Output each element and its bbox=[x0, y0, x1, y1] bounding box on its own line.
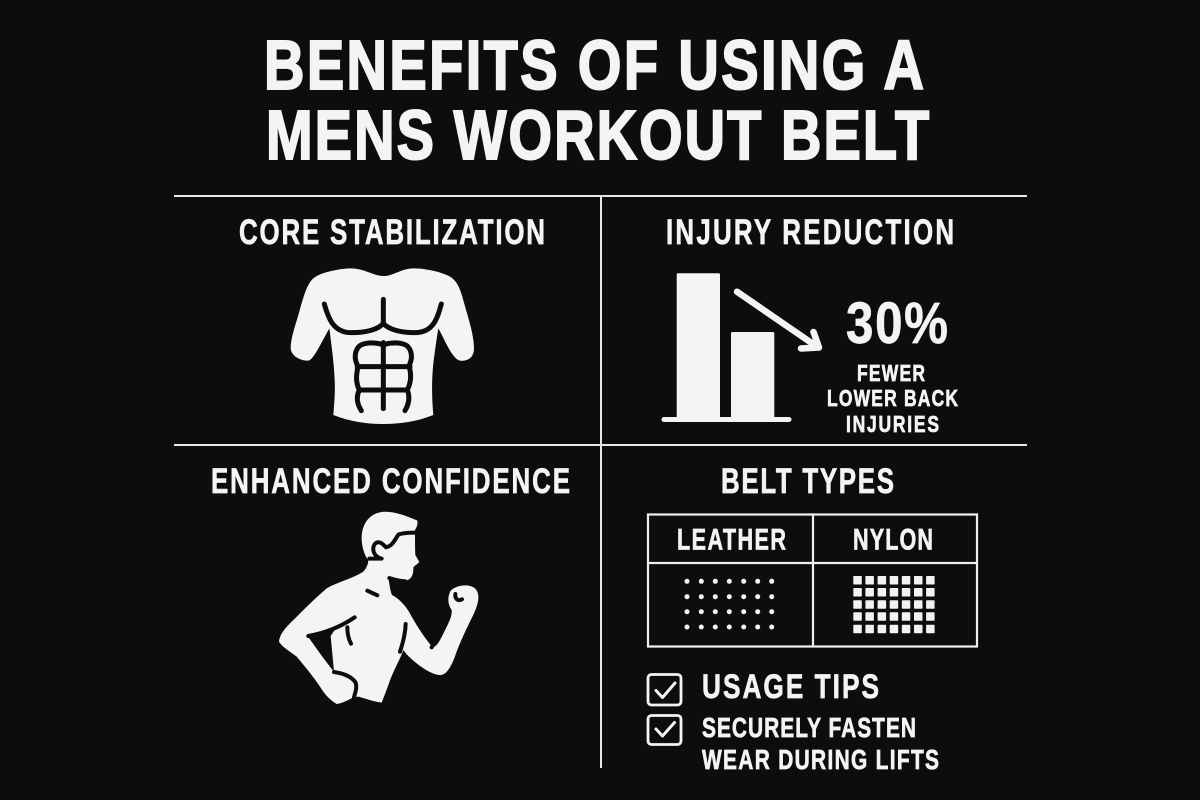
heading: core stabilization: CORE STABILIZATION bbox=[239, 212, 545, 252]
icon: muscular torso bbox=[291, 268, 474, 424]
tip: wear during lifts: WEAR DURING LIFTS bbox=[702, 745, 939, 776]
arrow: downward trend bbox=[737, 292, 819, 348]
label: leather: LEATHER bbox=[677, 522, 786, 556]
title: BENEFITS OF USING A bbox=[264, 27, 924, 104]
panel: belt types bbox=[648, 461, 977, 776]
label: nylon: NYLON bbox=[853, 522, 933, 556]
heading: usage tips: USAGE TIPS bbox=[702, 668, 879, 706]
caption: fewer lower back injuries bbox=[827, 362, 958, 438]
caption: fewer lower back injuries: LOWER BACK bbox=[827, 387, 958, 412]
bar chart: declining injuries bbox=[662, 273, 792, 422]
icon: checkbox one bbox=[648, 674, 681, 705]
usage tips bbox=[648, 668, 939, 776]
icon: confident man bbox=[279, 512, 478, 704]
title bbox=[264, 27, 929, 174]
panel: core stabilization bbox=[239, 212, 545, 424]
heading: injury reduction: INJURY REDUCTION bbox=[666, 212, 954, 252]
panel: injury reduction bbox=[662, 212, 958, 438]
caption: fewer lower back injuries: INJURIES bbox=[846, 413, 939, 438]
title: MENS WORKOUT BELT bbox=[266, 97, 929, 174]
panel: enhanced confidence bbox=[211, 461, 570, 704]
heading: belt types: BELT TYPES bbox=[721, 461, 894, 501]
tip: securely fasten: SECURELY FASTEN bbox=[702, 713, 916, 744]
heading: enhanced confidence: ENHANCED CONFIDENCE bbox=[211, 461, 570, 501]
statistic: 30%: 30% bbox=[846, 291, 948, 356]
pattern: nylon weave bbox=[853, 576, 935, 633]
icon: checkbox two bbox=[648, 716, 681, 744]
caption: fewer lower back injuries: FEWER bbox=[857, 362, 925, 387]
table: leather vs nylon bbox=[648, 514, 977, 646]
pattern: leather dots bbox=[684, 579, 774, 630]
